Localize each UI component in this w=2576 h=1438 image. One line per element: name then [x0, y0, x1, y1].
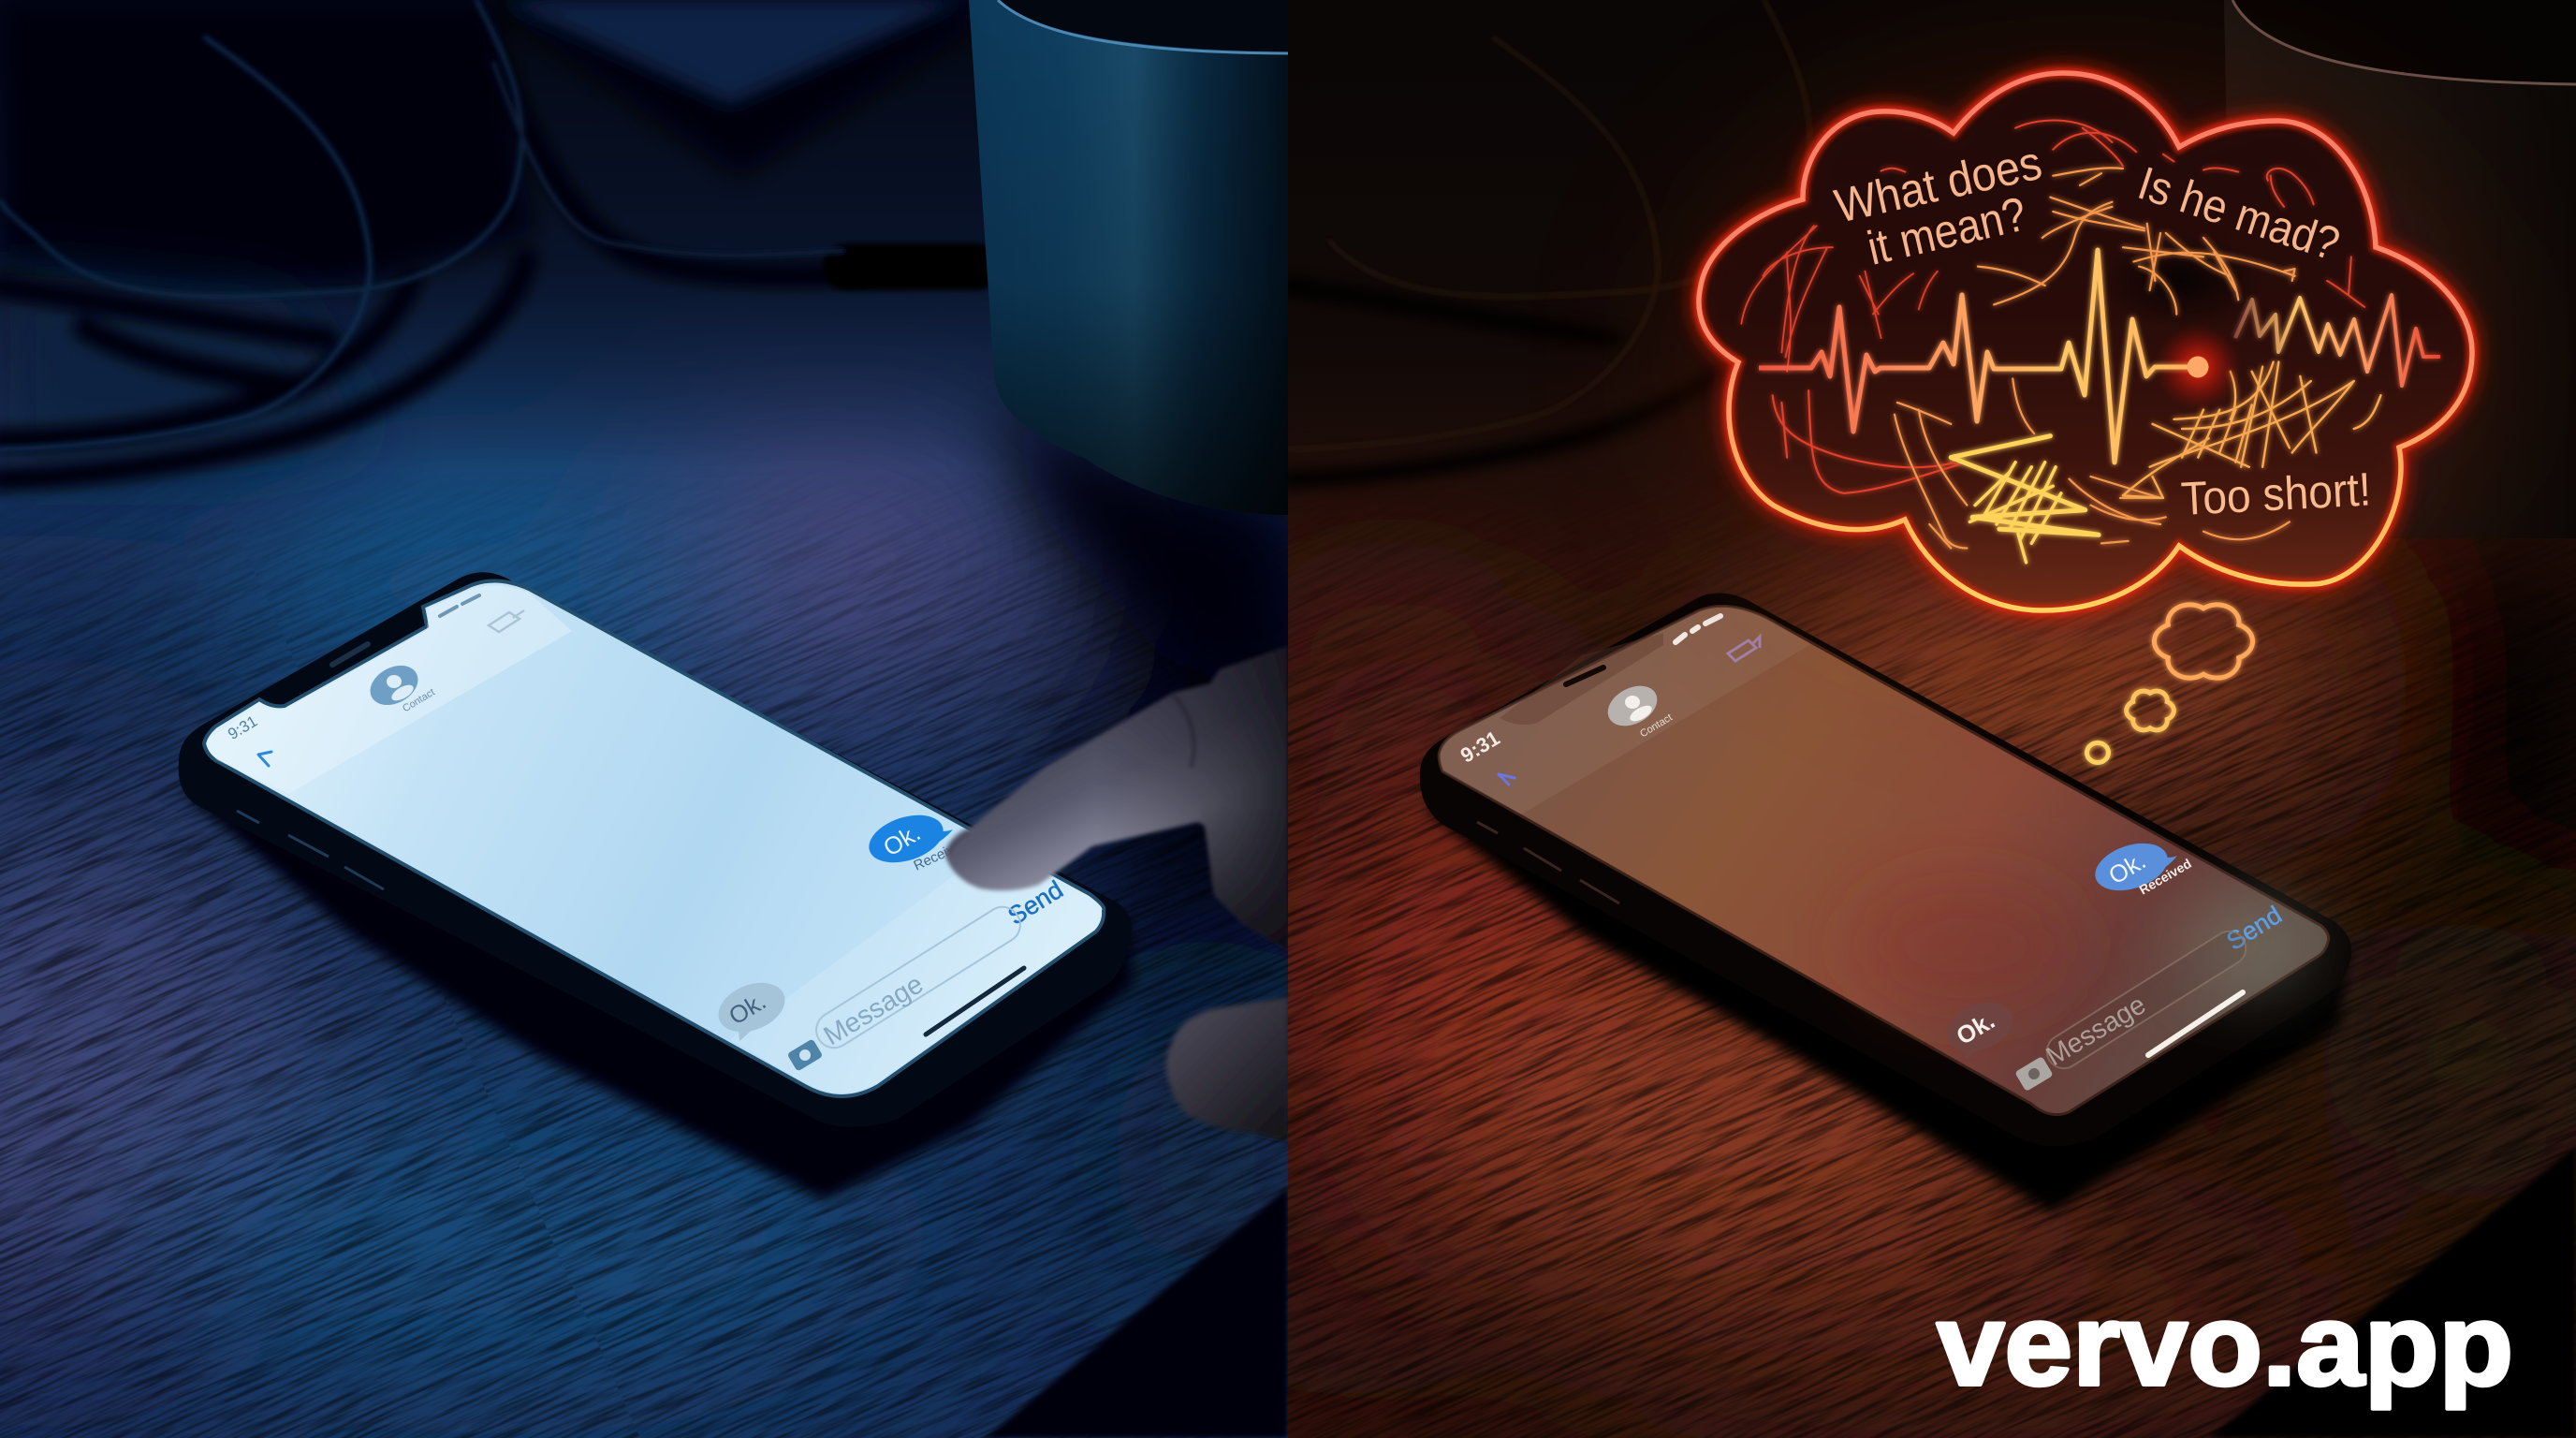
video icon	[1728, 637, 1760, 661]
wood grain	[1288, 0, 2576, 1438]
thought: What does it mean?: What does	[1830, 136, 2046, 233]
cloud interior	[1699, 73, 2472, 610]
status time: 9:31	[225, 712, 260, 743]
dark desk background	[1288, 0, 2576, 580]
back chevron	[258, 752, 271, 766]
grey message bubble: Ok.	[724, 987, 770, 1031]
blue message bubble	[2089, 835, 2177, 899]
side buttons	[237, 811, 384, 889]
hand: thumb	[1166, 997, 1288, 1142]
back chevron	[1499, 774, 1515, 785]
cables	[0, 0, 977, 479]
grey message bubble	[1940, 993, 2019, 1061]
phone: dimmed screen	[1420, 593, 2351, 1146]
right lattice scribble	[2123, 362, 2380, 498]
heartbeat line	[1759, 250, 2198, 462]
blue message bubble: Ok.	[878, 818, 925, 862]
contact avatar	[1601, 678, 1664, 734]
side buttons	[1477, 822, 1619, 903]
thought cloud	[1699, 73, 2472, 610]
phone shadow	[179, 789, 1134, 1200]
thought: Too short!: Too short!	[2180, 462, 2372, 525]
input area wash	[730, 861, 1097, 1093]
thought cloud glow on desk	[1694, 84, 2481, 646]
desk corner shadow	[986, 1187, 1288, 1438]
message input: Message	[819, 969, 929, 1051]
cloud tight red glow	[1699, 73, 2472, 610]
red glow at line end	[2155, 324, 2241, 410]
send label: Send	[1003, 875, 1068, 931]
screen colour wash	[1853, 880, 2312, 1011]
camera icon	[2014, 1056, 2054, 1092]
received label: Received	[2136, 856, 2194, 898]
send label: Send	[2222, 901, 2287, 956]
jagged anxious line	[2235, 295, 2440, 386]
camera icon	[787, 1038, 823, 1072]
contact name: Contact	[401, 687, 437, 714]
coffee mug	[969, 0, 1288, 515]
thought: Is he mad?: Is he mad?	[2132, 156, 2346, 271]
contact avatar	[363, 658, 425, 712]
cloud halo	[1699, 73, 2472, 610]
desk lighting	[0, 421, 1376, 1423]
trail bubble large	[2154, 605, 2253, 678]
blue message bubble	[863, 806, 953, 872]
earpiece	[1566, 668, 1603, 684]
screen	[204, 580, 1104, 1096]
dark desk background	[0, 0, 1018, 489]
heartbeat end dot	[2187, 356, 2209, 378]
contact name: Contact	[1638, 712, 1675, 740]
trail bubble medium	[2127, 691, 2174, 730]
earpiece	[332, 644, 368, 665]
red scribbles	[1741, 120, 2364, 493]
scribbles	[1741, 120, 2380, 563]
shadow beneath mug	[992, 403, 1288, 712]
thought trail bubbles	[2087, 605, 2253, 762]
thought: What does it mean?	[1830, 136, 2046, 275]
status icons	[1676, 616, 1720, 642]
home indicator	[2148, 992, 2243, 1055]
cloud outline	[1699, 73, 2472, 610]
hand: pointing finger	[945, 646, 1288, 951]
message input	[2041, 925, 2252, 1075]
wood grain	[0, 512, 1288, 1438]
grey message bubble: Ok.	[1952, 1006, 1999, 1050]
desk lighting	[1226, 524, 2576, 1404]
message input: Message	[2042, 990, 2151, 1072]
dense yellow scribble	[1951, 436, 2099, 535]
desk corner shadow	[2208, 1146, 2576, 1438]
status icons	[440, 595, 479, 616]
phone body	[179, 572, 1132, 1127]
phone body	[1420, 593, 2351, 1146]
home indicator	[926, 968, 1024, 1034]
panel: anxious red scene	[1226, 0, 2576, 1438]
screen	[1439, 606, 2329, 1115]
message input	[810, 901, 1027, 1054]
received label: Received	[912, 835, 971, 874]
orange scribbles	[1895, 168, 2295, 549]
trail bubble small	[2087, 743, 2108, 762]
brand wordmark: vervo.app	[1937, 1281, 2513, 1410]
video icon	[489, 610, 524, 632]
finger crease	[1173, 695, 1194, 768]
thought: What does it mean?: it mean?	[1863, 186, 2031, 275]
status time: 9:31	[1456, 726, 1503, 768]
phone: lit screen	[179, 572, 1132, 1127]
blue message bubble: Ok.	[2103, 846, 2150, 890]
cables	[1288, 0, 1814, 479]
background coffee mug	[2224, 0, 2576, 538]
fingertip shading	[947, 831, 968, 854]
grey message bubble	[711, 974, 792, 1041]
header band	[208, 586, 572, 794]
interior shadows	[2097, 234, 2265, 328]
notch	[1500, 633, 1663, 725]
background object: laptop corner	[487, 0, 973, 178]
phone shadow	[1420, 805, 2350, 1213]
header band	[1439, 606, 1811, 814]
panel: calm blue scene	[0, 0, 1376, 1438]
